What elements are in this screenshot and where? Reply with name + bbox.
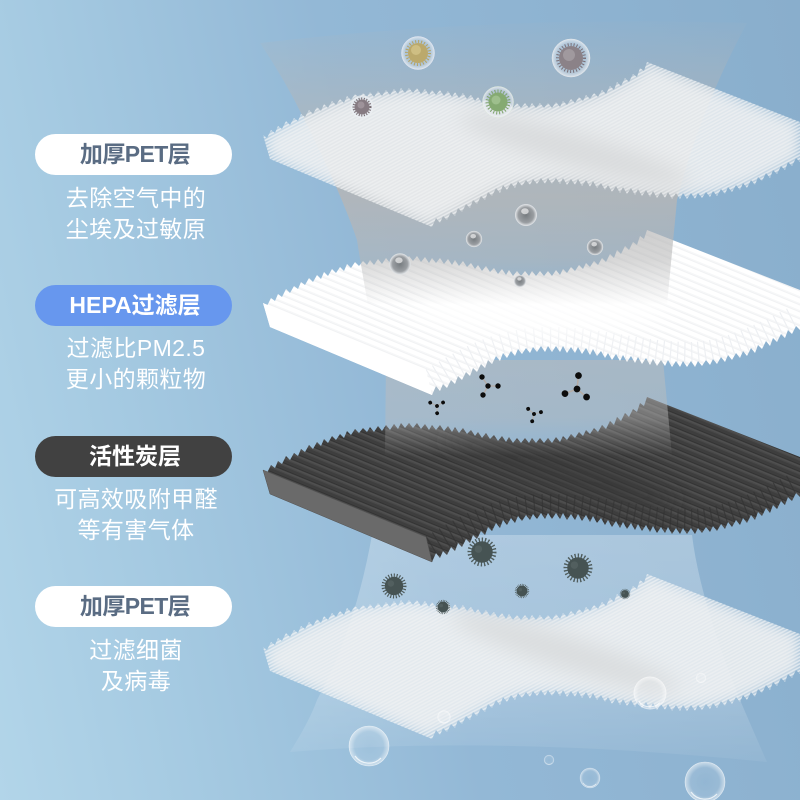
- label: bottom PET layer: 加厚PET层: [80, 593, 190, 619]
- icon: molecule 1: [479, 374, 501, 398]
- description: activated carbon layer: 可高效吸附甲醛: [54, 486, 218, 512]
- label: HEPA layer: [35, 285, 232, 326]
- icon: virus 1: [470, 540, 494, 564]
- icon: dust particle 2: [466, 231, 482, 247]
- icon: molecule 3: [428, 394, 449, 416]
- description: HEPA layer: 更小的颗粒物: [66, 366, 206, 392]
- filter layer: HEPA: [263, 230, 800, 395]
- label: activated carbon layer: [35, 436, 232, 477]
- description: top PET layer: 去除空气中的: [66, 185, 206, 211]
- icon: dust particle 4: [390, 254, 410, 274]
- icon: yellow pollen bubble: [402, 36, 434, 70]
- icon: molecule 4: [526, 403, 545, 424]
- icon: water bubble 3: [544, 755, 554, 765]
- description: activated carbon layer: [54, 486, 218, 543]
- description: bottom PET layer: 及病毒: [101, 668, 171, 694]
- label: top PET layer: [35, 134, 232, 175]
- description: bottom PET layer: [89, 637, 183, 694]
- icon: water bubble 2: [634, 677, 666, 709]
- icon: virus 6: [621, 590, 629, 598]
- icon: green pollen bubble: [482, 86, 514, 118]
- icon: molecule 2: [559, 371, 599, 410]
- icon: virus 4: [516, 585, 528, 597]
- icon: dust particle 3: [587, 239, 603, 255]
- icon: water bubble 4: [580, 768, 600, 788]
- icon: grey pollen bubble: [552, 39, 590, 77]
- filter layer: activated carbon: [263, 397, 800, 562]
- icon: small grey pollen bubble: [350, 96, 374, 118]
- icon: virus 3: [383, 575, 405, 597]
- icon: virus 5: [437, 601, 449, 613]
- icon: dust particle 1: [515, 204, 537, 226]
- filter layers illustration: [262, 36, 800, 800]
- description: activated carbon layer: 等有害气体: [78, 517, 194, 543]
- light funnel: lower: [290, 535, 767, 762]
- label: HEPA layer: HEPA过滤层: [69, 292, 201, 318]
- description: top PET layer: 尘埃及过敏原: [66, 216, 206, 242]
- description: HEPA layer: 过滤比PM2.5: [67, 335, 205, 361]
- description: HEPA layer: [66, 335, 206, 392]
- label: activated carbon layer: 活性炭层: [89, 443, 181, 469]
- label: top PET layer: 加厚PET层: [80, 141, 190, 167]
- icon: virus 2: [566, 556, 590, 580]
- icon: water bubble 5: [685, 762, 725, 800]
- light funnel: middle: [385, 360, 672, 456]
- icon: water bubble 1: [349, 726, 389, 766]
- filter layer: bottom PET mesh: [263, 574, 800, 739]
- description: top PET layer: [66, 185, 206, 242]
- icon: water bubble 6: [696, 673, 706, 683]
- filter layer: top PET mesh: [263, 62, 800, 227]
- icon: dust particle 5: [514, 275, 526, 287]
- description: bottom PET layer: 过滤细菌: [89, 637, 183, 663]
- icon: water bubble 7: [438, 710, 450, 724]
- light funnel: upper: [260, 21, 747, 305]
- label: bottom PET layer: [35, 586, 232, 627]
